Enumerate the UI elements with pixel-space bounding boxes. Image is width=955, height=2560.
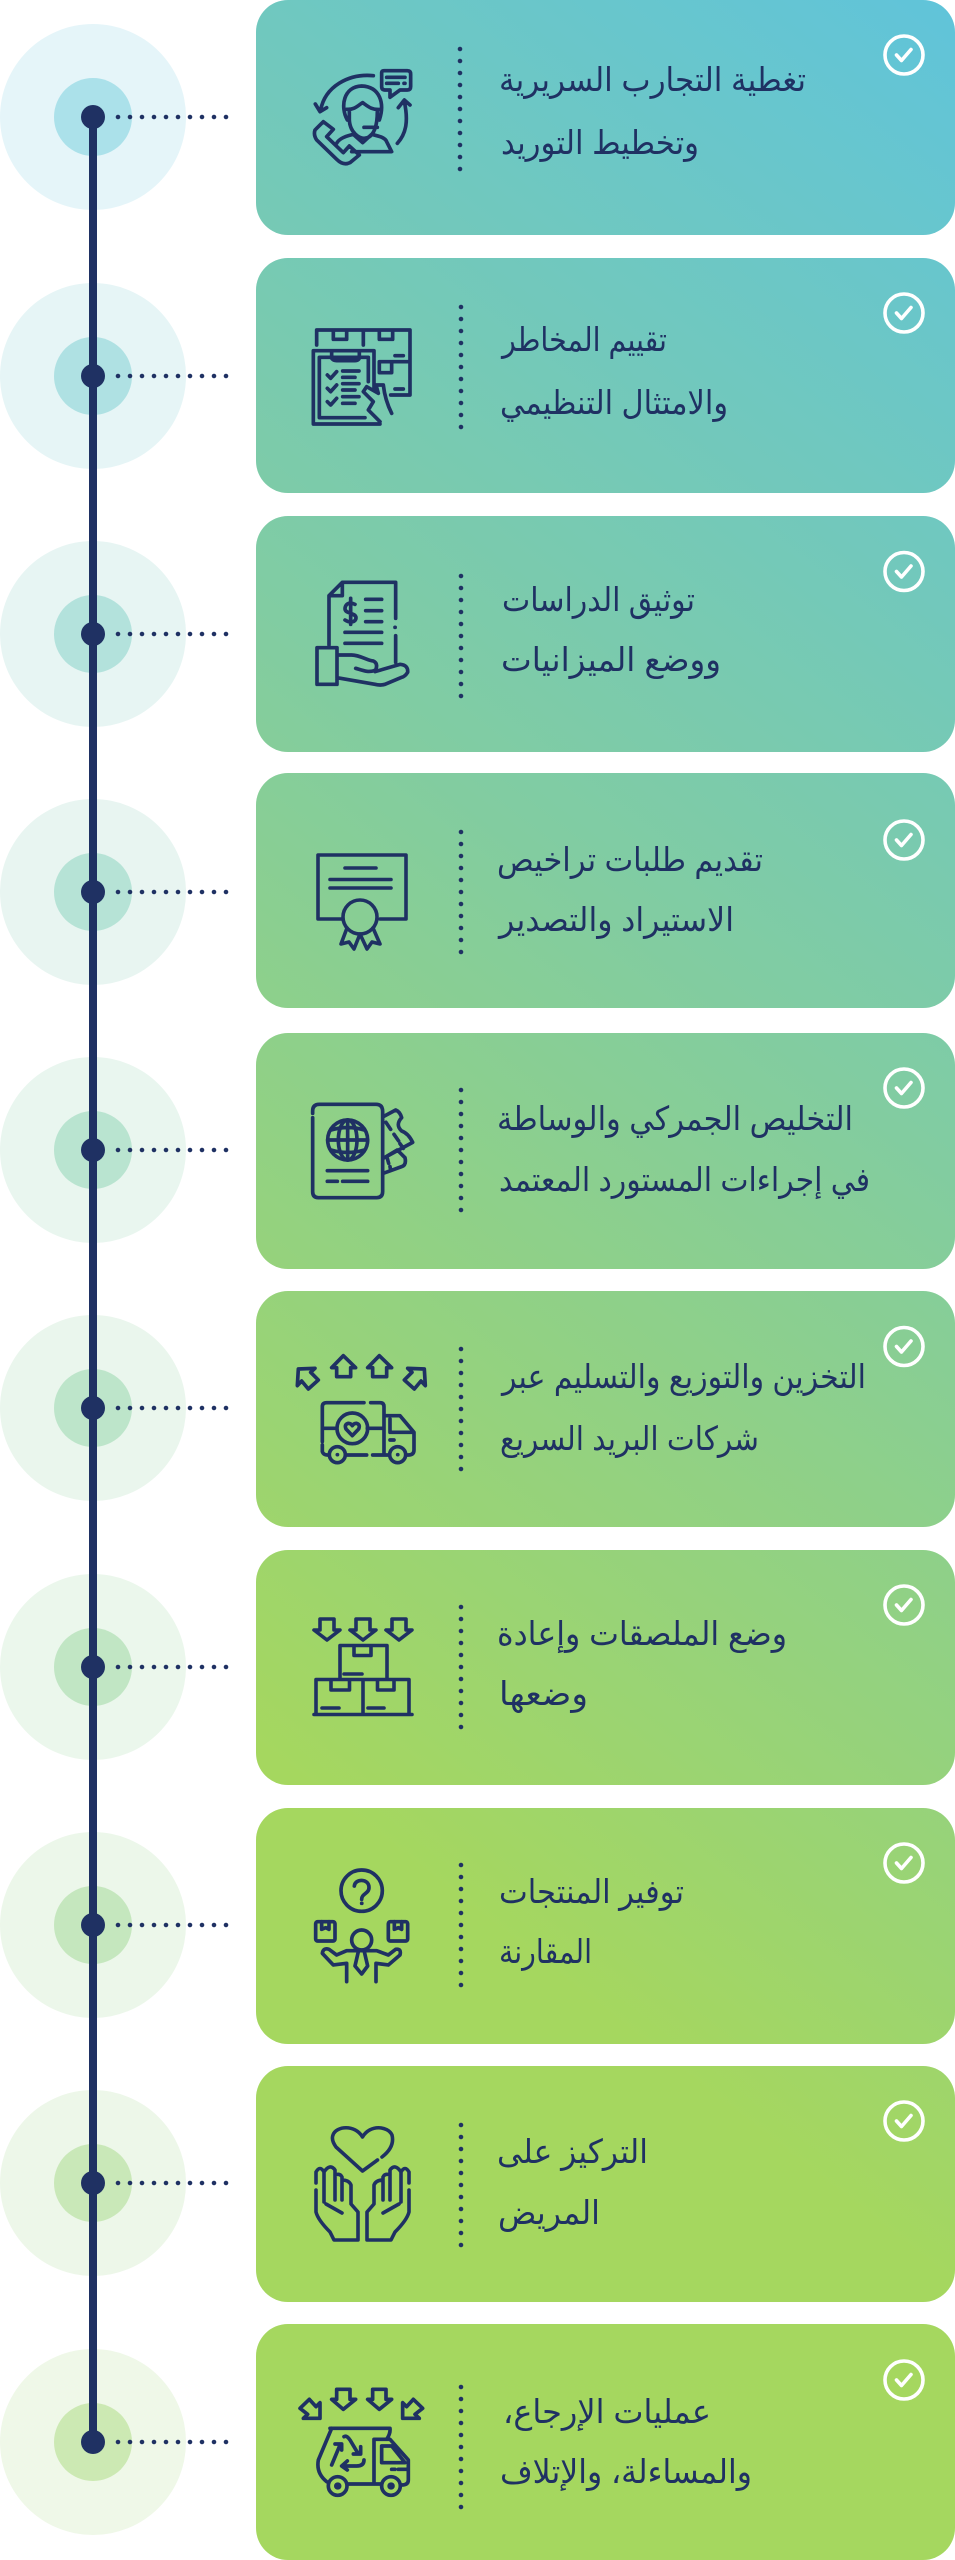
card 3: documentation and budgeting: ووضع الميزانيات: [501, 641, 721, 679]
icon: person with boxes and question: [316, 1870, 408, 1982]
card 4: import and export licences: الاستيراد والتصدير: [497, 901, 734, 939]
card 7: labelling and relabelling: وضعها: [499, 1675, 588, 1713]
node 4 halo: [0, 799, 186, 985]
card 7: labelling and relabelling: [256, 1550, 955, 1785]
card 2: risk assessment: [256, 258, 955, 493]
card 9: patient focus: [256, 2066, 955, 2302]
card 9 text: التركيز على: [497, 2133, 648, 2171]
card 9: patient focus: المريض: [498, 2194, 600, 2233]
check badge: [885, 294, 923, 332]
card 10 text: عمليات الإرجاع،: [503, 2393, 711, 2431]
card 6 text: التخزين والتوزيع والتسليم عبر: [500, 1358, 866, 1396]
icon: stacked boxes with arrows: [314, 1619, 412, 1714]
card 5: customs clearance: [256, 1033, 955, 1269]
check badge: [885, 1328, 923, 1366]
check badge: [885, 1844, 923, 1882]
icon: clipboard and boxes: [313, 330, 410, 424]
check badge: [885, 552, 923, 590]
icon: delivery truck with arrows: [297, 1356, 425, 1463]
node 5 halo: [0, 1057, 186, 1243]
card 3: documentation and budgeting: [256, 516, 955, 752]
card 10: returns, accountability, destruction: والمساءلة، والإتلاف: [500, 2453, 752, 2491]
node 7 halo: [0, 1574, 186, 1760]
node 10 halo: [0, 2349, 186, 2535]
card 5: customs clearance: في إجراءات المستورد المعتمد: [499, 1161, 870, 1200]
icon: recycling truck with arrows: [300, 2389, 423, 2495]
icon: invoice on hand: [317, 582, 408, 685]
icon: certificate: [318, 855, 406, 949]
card 5 text: التخليص الجمركي والوساطة: [497, 1100, 853, 1139]
node 2 halo: [0, 283, 186, 469]
card 1: clinical trial coverage: وتخطيط التوريد: [501, 124, 699, 162]
card 2 text: تقييم المخاطر: [500, 321, 667, 359]
card 3 text: توثيق الدراسات: [502, 581, 695, 620]
check badge: [885, 821, 923, 859]
icon: hands and heart: [316, 2128, 409, 2240]
check badge: [885, 2102, 923, 2140]
icon: passport and tickets: [313, 1104, 413, 1198]
icon: call agent: [314, 71, 411, 164]
card 1 text: تغطية التجارب السريرية: [499, 61, 806, 99]
card 8: comparator sourcing: المقارنة: [499, 1933, 592, 1971]
card 8: comparator sourcing: [256, 1808, 955, 2044]
card 4: import and export licences: [256, 773, 955, 1008]
node 8 halo: [0, 1832, 186, 2018]
timeline line with nodes: [81, 105, 105, 2454]
card 10: returns, accountability, destruction: [256, 2324, 955, 2560]
card 1: clinical trial coverage: [256, 0, 955, 235]
card 2: risk assessment: والامتثال التنظيمي: [500, 384, 728, 422]
check badge: [885, 1586, 923, 1624]
card 6: storage and distribution: شركات البريد السريع: [500, 1420, 759, 1458]
node 9 halo: [0, 2090, 186, 2276]
card 6: storage and distribution: [256, 1291, 955, 1527]
node 1 halo: [0, 24, 186, 210]
card 4 text: تقديم طلبات تراخيص: [497, 841, 763, 880]
check badge: [885, 1069, 923, 1107]
card 7 text: وضع الملصقات وإعادة: [497, 1615, 787, 1654]
check badge: [885, 2361, 923, 2399]
card 8 text: توفير المنتجات: [499, 1873, 684, 1911]
node 3 halo: [0, 541, 186, 727]
check badge: [885, 36, 923, 74]
node 6 halo: [0, 1315, 186, 1501]
